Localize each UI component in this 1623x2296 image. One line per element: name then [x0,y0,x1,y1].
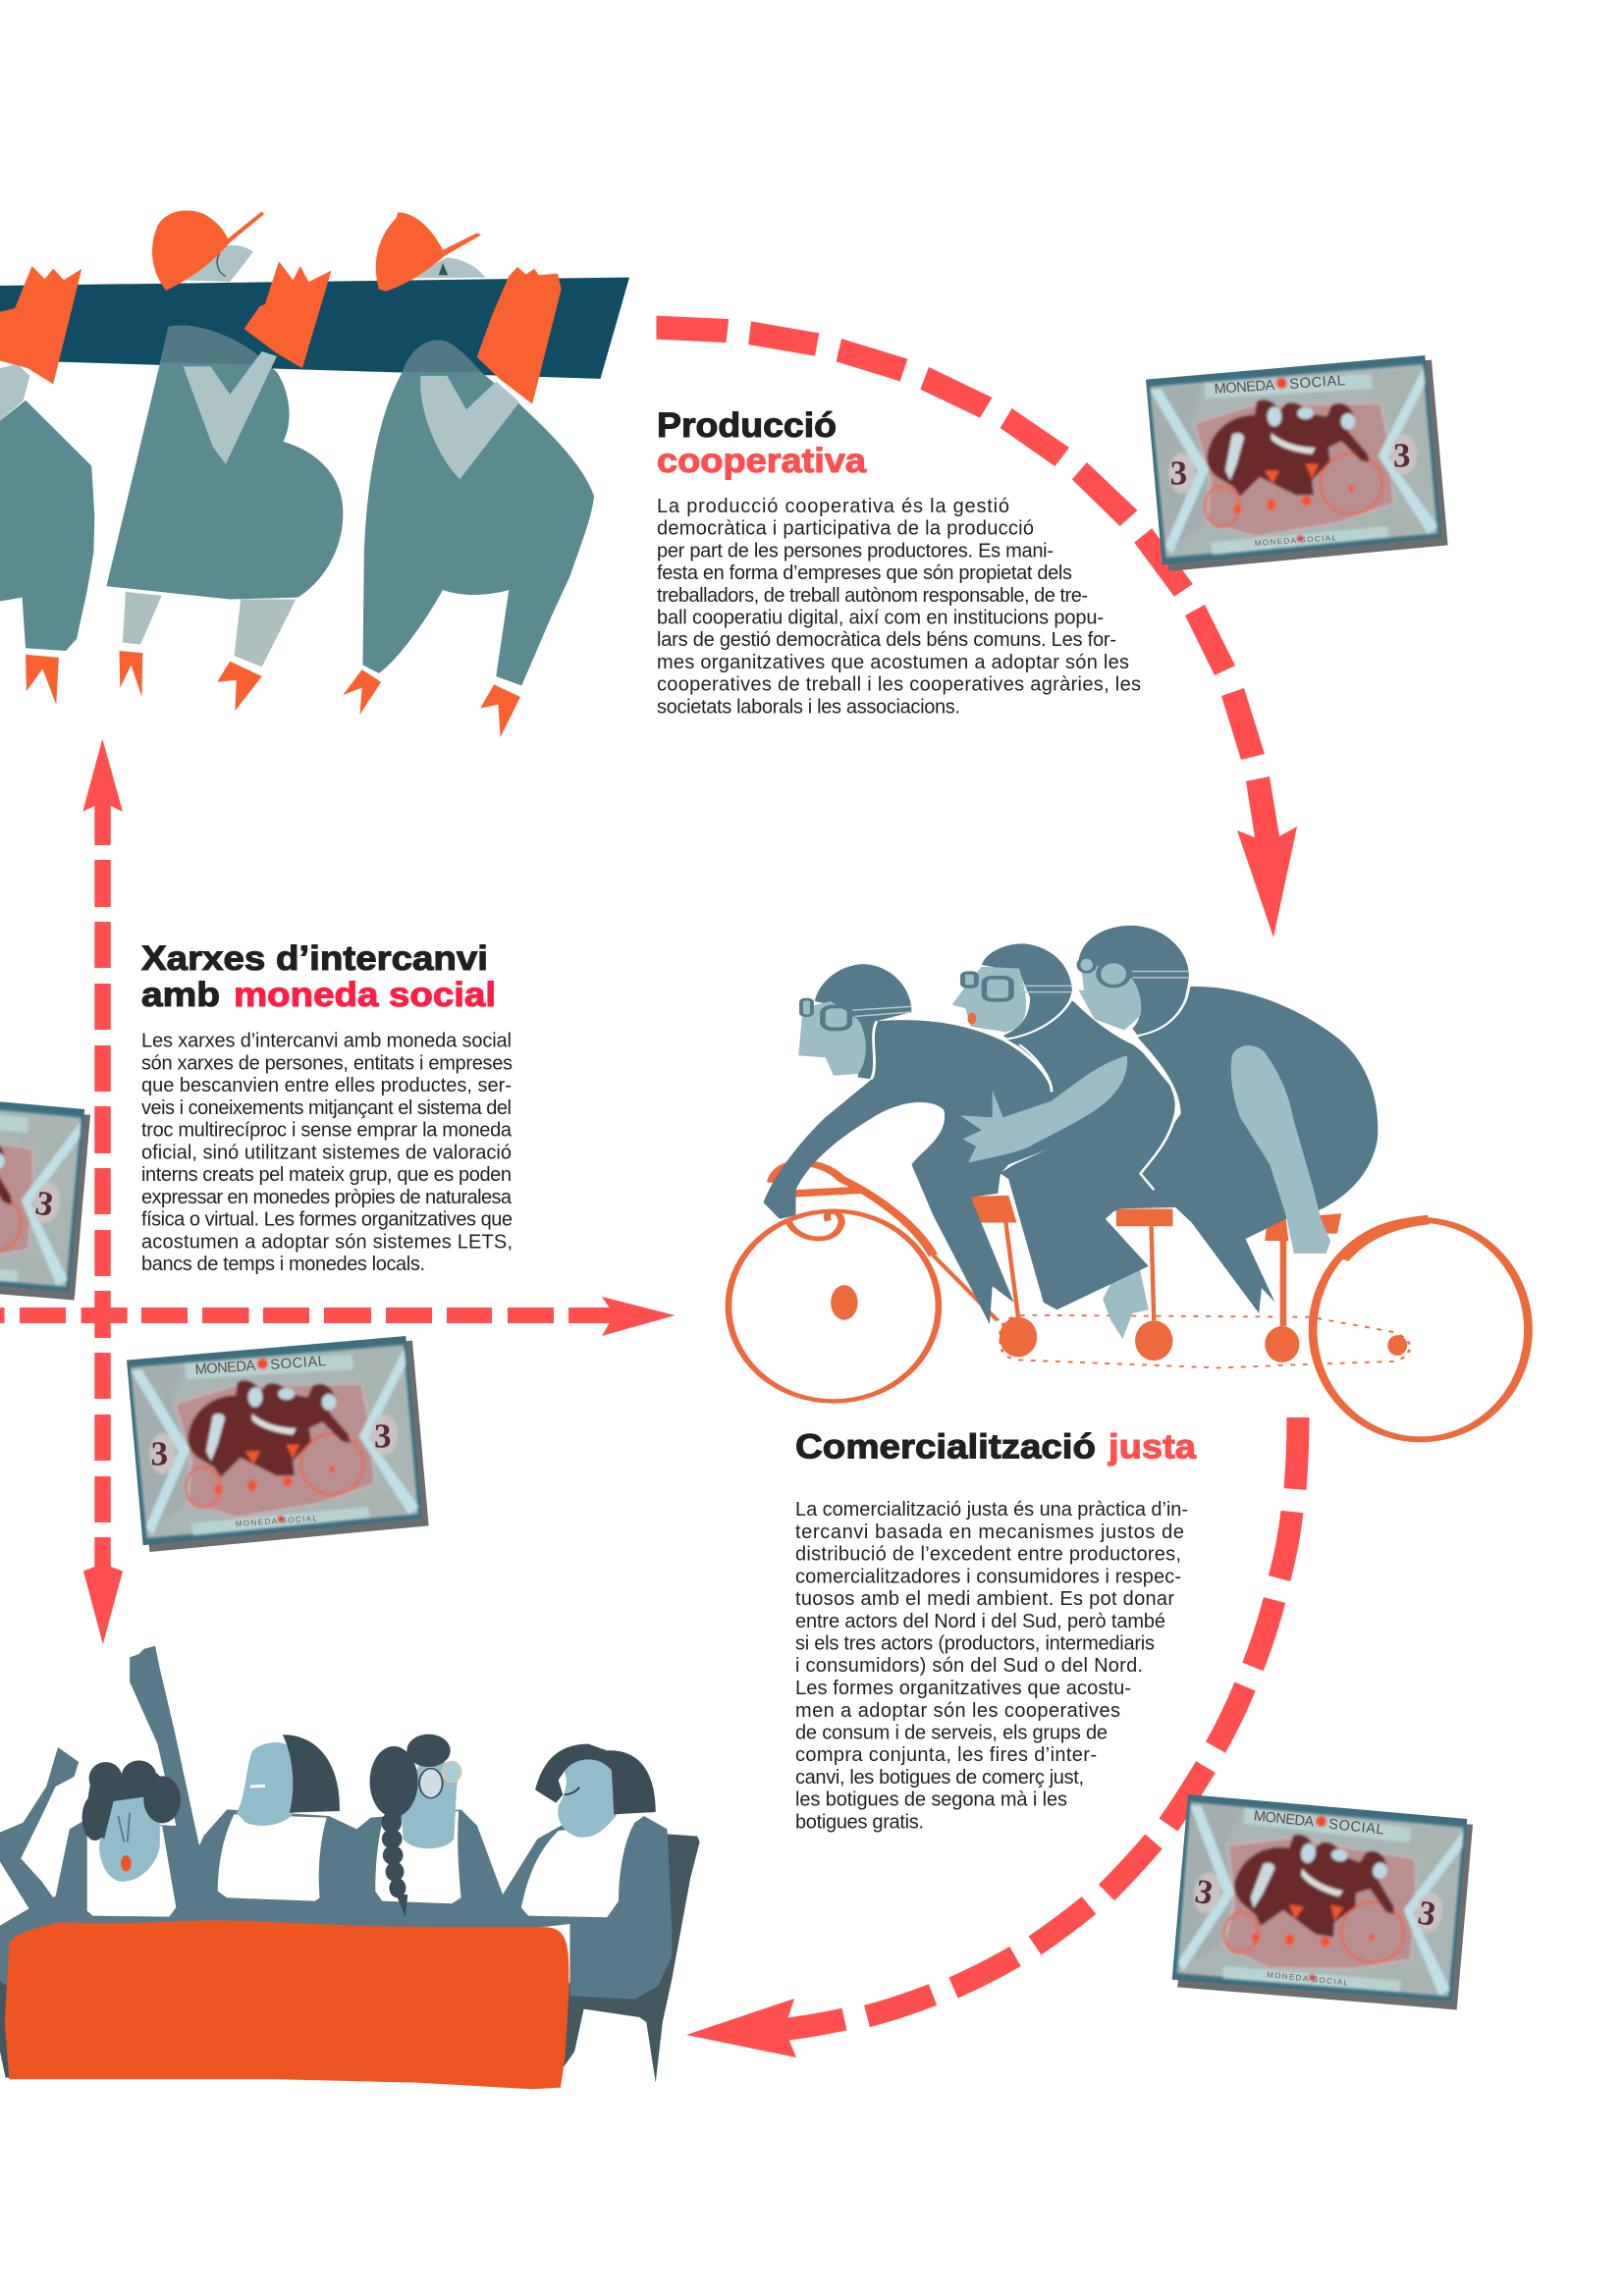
person 3 head and braid [370,1735,461,1917]
banknote: bottom right [1155,1771,1489,2036]
text block: Comercialització justa: La comercialització justa és una pràctica d’in- [795,1499,1188,1521]
bodies [0,1646,672,2000]
banknote: top right: 3 [1393,436,1410,474]
front rider [764,964,1052,1324]
text block: Comercialització justa: tercanvi basada en mecanismes justos de [795,1522,1184,1543]
banknote: lower centre left: SOCIAL [270,1354,326,1373]
arrow: vertical double-headed dashed arrow [82,739,123,1644]
banknote: top right [1146,355,1448,571]
middle rider [952,943,1176,1339]
banknote: top right: SOCIAL [1289,373,1345,393]
banknote: bottom right: MONEDA [1253,1808,1315,1831]
text block: Xarxes d'intercanvi: expressar en monedes pròpies de naturalesa [141,1187,513,1208]
text block: Producció cooperativa: ball cooperatiu digital, així com en institucions popu- [657,607,1104,628]
text block: Producció cooperativa: mes organitzatives que acostumen a adoptar són les [657,652,1129,673]
banknote: lower centre left: 3 [151,1434,168,1472]
heading: Comercialització justa [795,1427,1197,1467]
text block: Comercialització justa: canvi, les botigues de comerç just, [795,1767,1084,1789]
illustration: three riders on a tandem bicycle [729,926,1528,1439]
text block: Comercialització justa: compra conjunta, les fires d’inter- [795,1744,1097,1766]
text block: Comercialització justa: de consum i de serveis, els grups de [795,1722,1108,1743]
text block: Producció cooperativa: democràtica i participativa de la producció [657,518,1034,540]
worker feet [26,651,520,737]
banknote: top right: MONEDA [1214,378,1275,398]
text block: Producció cooperativa: lars de gestió democràtica dels béns comuns. Les for- [657,629,1116,651]
beam [0,278,629,379]
text block: Producció cooperativa: La producció cooperativa és la gestió [657,496,1009,517]
banknote: cropped at left edge [0,1061,107,1326]
text block: Comercialització justa: Les formes organitzatives que acostu- [795,1678,1131,1699]
heading: Comercialització justa: justa [1108,1427,1197,1467]
worker bodies [0,325,594,686]
text block: Xarxes d'intercanvi: que bescanvien entre elles productes, ser- [141,1075,512,1096]
worker faces [179,245,485,282]
text block: Comercialització justa: les botigues de segona mà i les [795,1789,1067,1811]
text block: Xarxes d'intercanvi [141,1031,513,1275]
illustration: workers carrying a beam [0,210,629,737]
heading: Xarxes d'intercanvi amb moneda social: Xarxes d’intercanvi [141,939,488,978]
text block: Comercialització justa: tuosos amb el medi ambient. Es pot donar [795,1588,1174,1610]
banknote: lower centre left: MONEDA [194,1359,256,1378]
person 4 head [535,1744,656,1838]
worker hands [0,261,562,404]
left arm [0,1747,79,1914]
text block: Xarxes d'intercanvi: veis i coneixements mitjançant el sistema del [141,1097,512,1119]
table cloth [5,1920,568,2089]
text block: Xarxes d'intercanvi: troc multirecíproc i sense emprar la moneda [141,1120,513,1142]
text block: Producció cooperativa: cooperatives de treball i les cooperatives agràries, les [657,674,1141,696]
heading: Producció cooperativa [657,406,867,480]
text block: Xarxes d'intercanvi: oficial, sinó utilitzant sistemes de valoració [141,1143,512,1164]
text block: Comercialització justa: entre actors del Nord i del Sud, però també [795,1611,1165,1632]
back rider [1078,926,1378,1313]
text block: Producció cooperativa: societats laborals i les associacions. [657,696,960,718]
banknote: bottom right: 3 [1415,1894,1438,1934]
text block: Comercialització justa: i consumidors) són del Sud o del Nord. [795,1655,1143,1677]
heading: Xarxes d'intercanvi amb moneda social: moneda social [234,976,496,1014]
text block: Xarxes d'intercanvi: acostumen a adoptar són sistemes LETS, [141,1231,513,1253]
text block: Producció cooperativa: per part de les persones productores. Es mani- [657,540,1054,561]
arrow: dashed curve from commercialisation to the table [686,1417,1298,2057]
text block: Xarxes d'intercanvi: Les xarxes d’intercanvi amb moneda social [141,1031,512,1052]
bicycle frame and wheels [729,1163,1528,1439]
text block: Producció cooperativa [657,496,1141,718]
text block: Comercialització justa: si els tres actors (productors, intermediaris [795,1633,1155,1655]
heading: Xarxes d'intercanvi amb moneda social: amb [141,976,220,1014]
banknote: lower centre left [127,1336,429,1552]
text block: Producció cooperativa: festa en forma d’empreses que són propietat dels [657,562,1072,584]
banknote: cropped at left edge: 3 [32,1184,56,1224]
text block: Producció cooperativa: treballadors, de treball autònom responsable, de tre- [657,585,1088,607]
heading: Comercialització justa: Comercialització [795,1427,1096,1467]
person 2 head [237,1735,340,1826]
table under edge [0,1981,12,2078]
text block: Comercialització justa: comercialitzadores i consumidores i respec- [795,1566,1181,1587]
shirts [87,1811,635,1917]
banknote: bottom right: 3 [1192,1872,1216,1912]
heading: Producció cooperativa: Producció [657,406,837,445]
text block: Comercialització justa: distribució de l’excedent entre productores, [795,1543,1181,1565]
arrow: dashed curve from production to commercialisation [656,316,1297,937]
banknote: top right: 3 [1170,454,1187,492]
person 1 head [82,1760,181,1882]
bicycle hubs and saddles [831,1196,1407,1362]
text block: Xarxes d'intercanvi: són xarxes de persones, entitats i empreses [141,1052,513,1074]
text block: Comercialització justa [795,1499,1188,1833]
banknote: bottom right: MONEDA SOCIAL [1267,1970,1349,1988]
text block: Xarxes d'intercanvi: física o virtual. Les formes organitzatives que [141,1209,513,1231]
heading: Xarxes d'intercanvi amb moneda social [141,939,496,1014]
banknote: bottom right: SOCIAL [1327,1817,1384,1839]
text block: Xarxes d'intercanvi: interns creats pel mateix grup, que es poden [141,1164,512,1186]
middle rider arm around front rider [960,1055,1127,1162]
banknote: lower centre left: MONEDA SOCIAL [236,1514,318,1528]
arrow: horizontal dashed arrow [0,1297,676,1336]
illustration: people sitting around a table [0,1646,700,2089]
text block: Comercialització justa: botigues gratis. [795,1811,924,1833]
worker hats [152,210,481,292]
heading: Producció cooperativa: cooperativa [657,442,867,480]
text block: Comercialització justa: men a adoptar són les cooperatives [795,1700,1120,1722]
chair [563,1834,700,2083]
banknote: lower centre left: 3 [374,1416,391,1455]
text block: Xarxes d'intercanvi: bancs de temps i monedes locals. [141,1254,425,1275]
banknote: top right: MONEDA SOCIAL [1255,533,1337,548]
